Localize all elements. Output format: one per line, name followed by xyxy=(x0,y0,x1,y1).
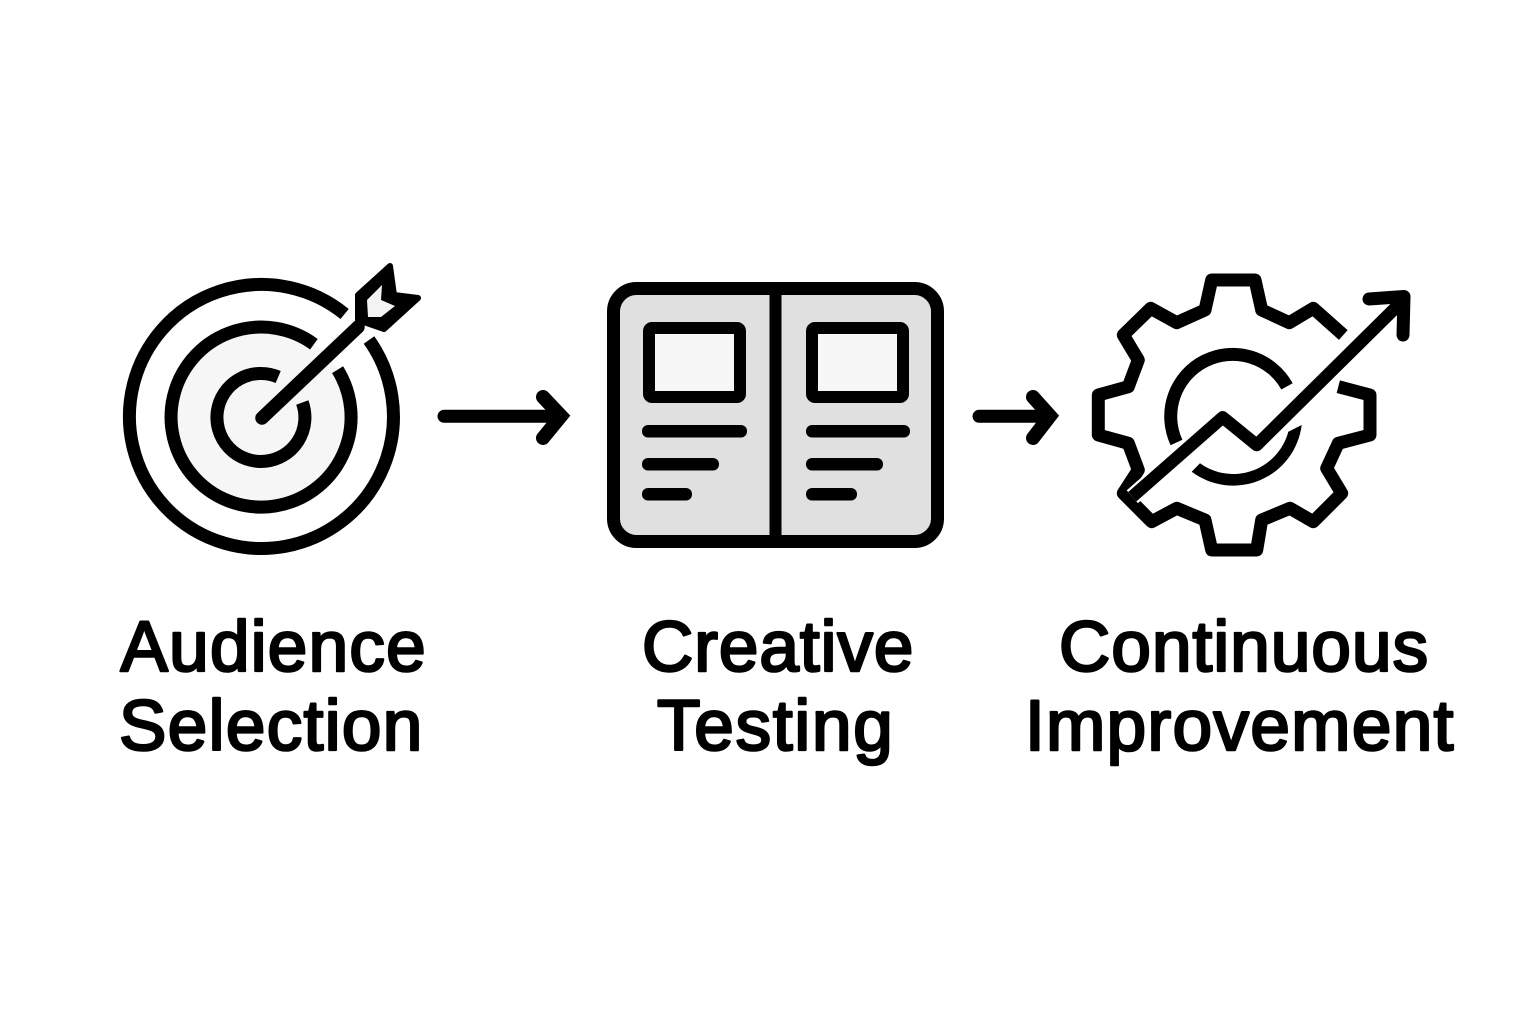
trend line xyxy=(1132,303,1400,497)
icon: side-by-side creative panels xyxy=(614,288,938,542)
outer ring xyxy=(129,285,393,549)
arrow: audience to creative xyxy=(444,397,561,438)
label: Audience Selection: Audience xyxy=(120,608,427,687)
label: Creative Testing: Testing xyxy=(657,687,895,766)
inner ring lower arc xyxy=(1192,425,1302,486)
arrow fletching xyxy=(358,266,418,329)
label: Continuous Improvement: Continuous xyxy=(1059,608,1429,687)
target centre fill xyxy=(171,327,351,507)
arrow fletching highlight xyxy=(367,285,395,317)
arrow: creative to improvement xyxy=(979,397,1050,438)
icon: gear with rising trend arrow xyxy=(1098,280,1404,550)
inner ring upper arc xyxy=(1171,354,1287,442)
left text lines xyxy=(642,425,747,500)
icon: target with arrow xyxy=(129,266,418,549)
inner ring xyxy=(217,373,305,461)
centre divider xyxy=(770,290,782,540)
left image placeholder xyxy=(649,328,740,397)
label: Creative Testing: Creative xyxy=(642,608,914,687)
label: Audience Selection: Selection xyxy=(119,687,424,766)
right image placeholder xyxy=(812,328,903,397)
arrow shaft xyxy=(262,327,358,418)
middle ring xyxy=(171,327,351,507)
label: Continuous Improvement: Improvement xyxy=(1025,687,1455,766)
label: Audience Selection xyxy=(119,608,427,766)
gear outline xyxy=(1098,280,1370,550)
trend line halo xyxy=(1132,303,1400,497)
panel frame xyxy=(614,288,938,542)
trend arrow head xyxy=(1369,296,1404,335)
right text lines xyxy=(806,425,910,500)
label: Creative Testing xyxy=(642,608,914,766)
label: Continuous Improvement xyxy=(1025,608,1455,766)
